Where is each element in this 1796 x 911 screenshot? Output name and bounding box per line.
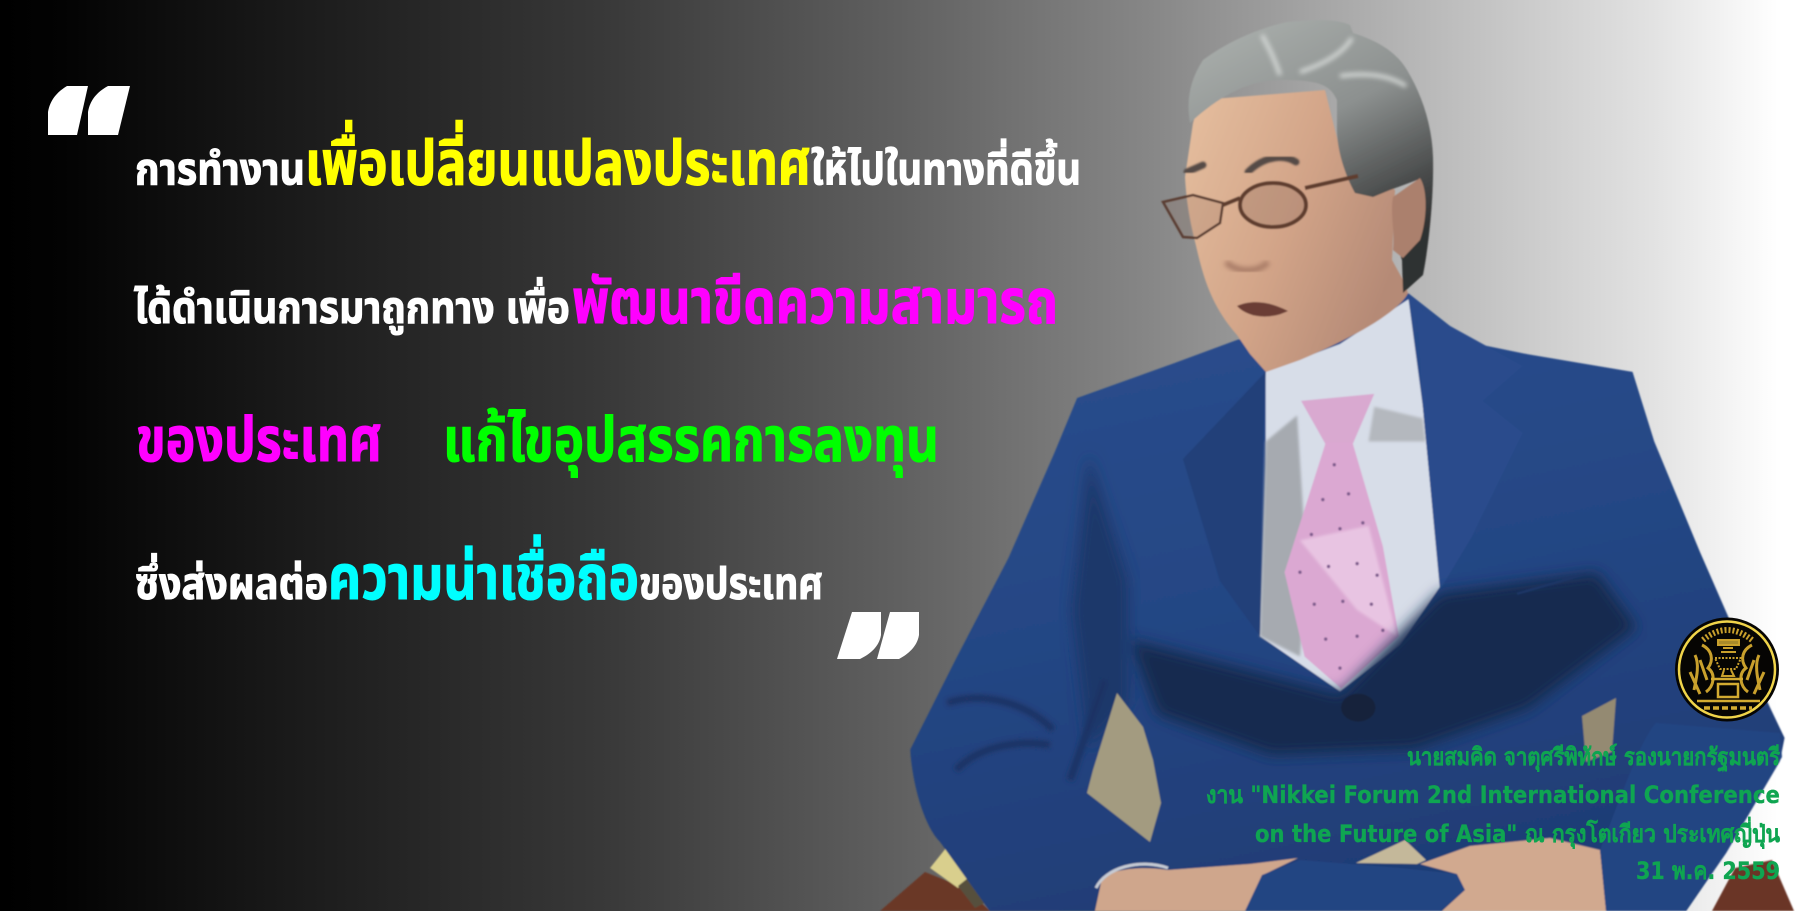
flame arc (1703, 630, 1752, 640)
chair wood left (880, 848, 990, 911)
cyan emphasis: ความน่าเชื่อถือ (328, 534, 639, 613)
green emphasis: แก้ไขอุปสรรคการลงทุน (443, 406, 939, 477)
quote line 2 (134, 268, 1058, 337)
white text: part one: ซึ่งส่งผลต่อ (135, 553, 328, 609)
caption (1206, 743, 1781, 885)
left hand and cuff (1095, 858, 1298, 911)
sleeve folds (947, 680, 1105, 780)
white text: ได้ดำเนินการมาถูกทาง เพื่อ (134, 277, 570, 335)
portrait photo of speaker (880, 20, 1794, 911)
chair upholstery right (1582, 698, 1616, 762)
nose and mouth (1226, 262, 1288, 317)
neck and face (1185, 90, 1408, 372)
white text: part one: การทำงาน (135, 146, 305, 194)
closing quotation mark (837, 612, 919, 659)
centre sleeve (1245, 860, 1465, 911)
eyebrows (1187, 158, 1296, 172)
magenta emphasis: ของประเทศ (136, 406, 382, 475)
opening quotation mark (48, 86, 130, 135)
right hand (1420, 838, 1606, 911)
quote line 3 (136, 406, 939, 477)
magenta emphasis: พัฒนาขีดความสามารถ (572, 268, 1058, 337)
tie (1285, 394, 1399, 688)
jacket lapels and shadows (1071, 308, 1637, 755)
emblem seal (1675, 618, 1779, 722)
hair (1189, 20, 1433, 293)
left lion (1690, 645, 1713, 694)
chair wood right (1712, 860, 1794, 911)
quote line 1 (135, 119, 1081, 198)
beige document (1356, 840, 1426, 864)
quote line 4 (135, 534, 823, 613)
suit jacket (910, 293, 1785, 911)
urn (1715, 640, 1741, 676)
shirt (1260, 299, 1440, 691)
pedestal (1697, 679, 1760, 708)
ear (1392, 178, 1426, 258)
white text: part two: ของประเทศ (639, 560, 823, 609)
suit body and shirt (910, 293, 1785, 911)
glasses (1163, 176, 1358, 238)
yellow emphasis: เพื่อเปลี่ยนแปลงประเทศ (305, 119, 811, 198)
chair upholstery between arm and torso (1087, 693, 1161, 842)
white text: part two: ให้ไปในทางที่ดีขึ้น (811, 138, 1081, 194)
right sleeve (1600, 723, 1782, 911)
right lion (1741, 645, 1764, 694)
